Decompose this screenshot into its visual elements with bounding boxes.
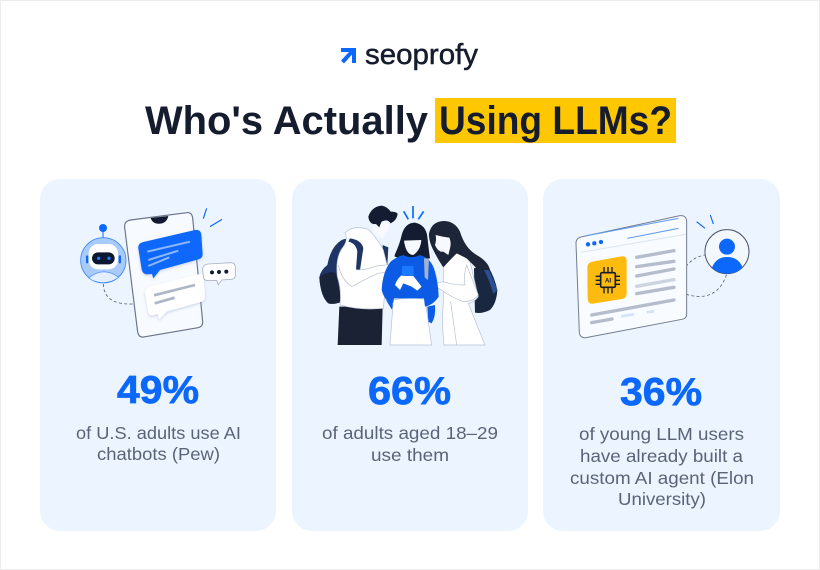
AI chip tile	[587, 256, 627, 304]
description: U.S. adults: of U.S. adults use AI	[76, 423, 241, 443]
stat: 36%: 36%	[620, 371, 702, 414]
logo: seoprofy	[341, 39, 479, 71]
AI chip tile: AI	[605, 277, 611, 284]
panel background	[292, 179, 528, 531]
title	[145, 98, 676, 143]
logo wordmark: seoprofy	[365, 39, 479, 71]
blue chat bubble	[138, 230, 203, 278]
icon: logo arrow	[341, 48, 356, 64]
description: U.S. adults: chatbots (Pew)	[97, 444, 220, 464]
description: young LLM users	[570, 424, 754, 509]
illustration: AI browser window and user	[576, 215, 749, 338]
description: U.S. adults	[76, 423, 241, 464]
description: young LLM users: have already built a	[580, 446, 743, 466]
typing bubble	[203, 263, 235, 285]
description: adults 18-29: of adults aged 18–29	[322, 423, 498, 443]
illustration: three young people with phone	[319, 206, 497, 345]
middle person	[382, 223, 439, 345]
right person	[429, 221, 490, 345]
browser window	[576, 216, 687, 338]
sparks	[697, 215, 713, 228]
panel background	[40, 179, 276, 531]
robot avatar	[81, 224, 126, 283]
title highlight	[435, 98, 676, 143]
illustration: phone with chatbot	[81, 208, 235, 337]
text lines	[592, 251, 674, 323]
stat: 66%: 66%	[368, 370, 451, 413]
sparks	[404, 206, 424, 219]
description: adults 18-29: use them	[371, 445, 449, 465]
description: young LLM users: custom AI agent (Elon	[570, 468, 754, 488]
title text: highlighted part: Using LLMs?	[439, 99, 672, 143]
description: young LLM users: University)	[618, 489, 706, 509]
panel: young LLM users	[543, 179, 780, 531]
left person	[337, 206, 399, 345]
description: adults 18-29	[322, 423, 498, 465]
panel: adults 18-29	[292, 179, 528, 531]
panel: U.S. adults	[40, 179, 276, 531]
title text: first part: Who's Actually	[145, 99, 429, 143]
stat: 49%: 49%	[117, 369, 199, 412]
left person backpack	[319, 238, 363, 304]
right person backpack	[474, 266, 497, 313]
user avatar	[705, 230, 749, 274]
phone	[125, 213, 203, 337]
dashed connector	[103, 284, 133, 304]
white chat bubble	[145, 274, 205, 319]
dashed connector	[686, 255, 727, 296]
sparks	[203, 208, 222, 227]
panel background	[543, 179, 780, 531]
description: young LLM users: of young LLM users	[579, 424, 744, 444]
